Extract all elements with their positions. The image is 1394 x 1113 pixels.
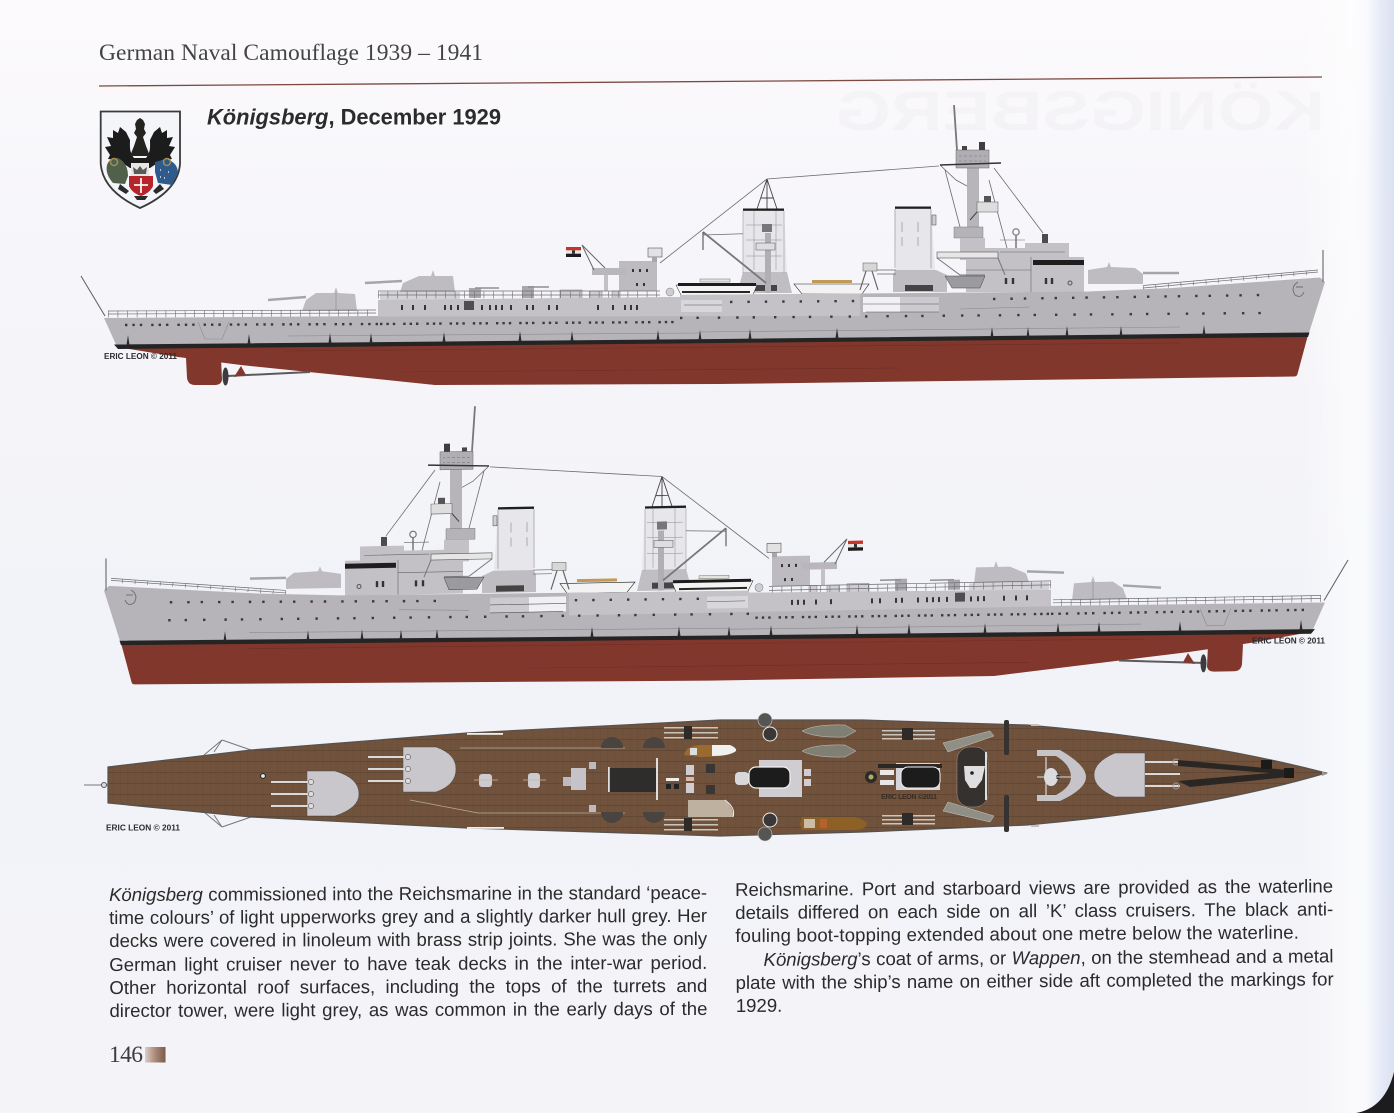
hawser bars <box>1004 720 1039 832</box>
text column right: details differed on each side on all ’K’ class cruisers. The black anti- <box>735 899 1333 923</box>
anchor chains <box>1178 760 1288 787</box>
deck outline <box>108 720 1326 836</box>
eagle head and crown <box>130 118 150 156</box>
text column right: fouling boot-topping extended about one metre below the waterline. <box>735 922 1299 946</box>
plan credit on deck: ERIC LEON ©2011 <box>881 793 937 801</box>
text column left <box>109 881 708 1020</box>
superstructure windows <box>402 305 637 310</box>
stern bollard <box>261 774 265 778</box>
after funnel plan <box>735 760 811 797</box>
text column right: Reichsmarine. Port and starboard views are provided as the waterline <box>735 875 1333 900</box>
waist squares <box>686 764 715 794</box>
aft fire control tower <box>582 245 662 291</box>
bow crest <box>1293 282 1304 296</box>
plating lines <box>198 307 1180 339</box>
bow fitting <box>1322 771 1327 776</box>
gutter shadow <box>1356 1072 1394 1113</box>
grey hull <box>104 278 1325 349</box>
red shield with cross <box>129 176 153 196</box>
fore funnel plan <box>865 763 942 790</box>
page number: 146 <box>109 1042 143 1068</box>
deck markers <box>410 733 625 829</box>
louvred hatch <box>464 301 474 310</box>
anti-aircraft mounts forward <box>882 728 935 825</box>
stern jack staff <box>81 276 105 316</box>
after turret 1 <box>268 287 357 311</box>
text column right: 1929. <box>736 995 782 1016</box>
anti-aircraft mounts aft <box>664 726 718 831</box>
aft turret A <box>271 771 359 816</box>
launch bottom <box>688 800 734 817</box>
red anti-fouling hull <box>117 335 1308 385</box>
searchlight platforms <box>758 713 777 841</box>
text column left: Other horizontal roof surfaces, including the tops of the turrets and <box>109 974 707 997</box>
supporters base <box>118 184 164 200</box>
text column right <box>735 875 1334 1016</box>
aft turret B <box>368 747 456 792</box>
after turret 2 <box>365 270 460 300</box>
launch top <box>684 745 736 757</box>
black boot-topping <box>114 332 1310 349</box>
text column left: decks were covered in linoleum with brass strip joints. She was the only <box>109 928 707 951</box>
port profile ship (mirrored view) <box>104 389 1348 694</box>
text column left: German light cruiser never to have teak decks in the inter-war period. <box>109 951 707 974</box>
crane and searchlight tower <box>703 224 775 293</box>
green quarter <box>107 158 128 184</box>
running head: German Naval Camouflage 1939 – 1941 <box>99 40 483 66</box>
darker hull seams <box>285 343 1180 372</box>
text column right: plate with the ship’s name on either side aft completed the markings for <box>736 968 1334 993</box>
horseshoe platform <box>1037 750 1086 801</box>
bridge superstructure <box>937 229 1084 292</box>
ship title: Königsberg, December 1929 <box>207 104 501 130</box>
stern paravane booms <box>84 740 251 827</box>
upper deck fittings <box>560 288 674 299</box>
credit middle: ERIC LEON © 2011 <box>1252 636 1325 646</box>
ensign flag <box>566 247 581 257</box>
main mast <box>940 105 1001 238</box>
portholes <box>125 295 1263 325</box>
rudder <box>186 358 222 385</box>
text column right: Königsberg’s coat of arms, or Wappen, on the stemhead and a metal <box>763 945 1334 969</box>
page number block <box>145 1047 166 1062</box>
credit top: ERIC LEON © 2011 <box>104 352 178 361</box>
starboard profile ship <box>81 105 1325 386</box>
central dark deckhouse <box>608 758 679 800</box>
tripod mast <box>757 179 777 212</box>
eagle wings <box>105 127 175 168</box>
text column left: time colours’ of light upperworks grey and a slightly darker hull grey. Her <box>109 905 707 928</box>
boats plan <box>800 725 867 830</box>
stern fairlead <box>102 782 106 788</box>
fore funnel <box>893 206 947 292</box>
show-through lettering: KÖNIGSBERG <box>835 79 1325 142</box>
railings <box>108 270 1318 314</box>
ship's boats <box>676 263 896 297</box>
propeller and shaft <box>222 366 310 386</box>
after funnel <box>737 208 792 293</box>
crown panel <box>131 163 149 177</box>
bow jack staff <box>1322 250 1324 282</box>
plan view of the deck <box>84 713 1327 841</box>
text column left: Königsberg commissioned into the Reichsmarine in the standard ‘peace- <box>109 881 707 904</box>
header rule <box>99 77 1322 86</box>
text column left: director tower, were light grey, as was common in the early days of the <box>109 997 707 1020</box>
credit plan: ERIC LEON © 2011 <box>106 824 181 832</box>
forward turret <box>1088 262 1179 284</box>
rigging stays <box>660 165 1043 267</box>
coat of arms shield <box>101 112 180 208</box>
semicircular shelters <box>601 737 665 823</box>
bridge plan <box>943 731 994 822</box>
forward turret plan <box>1094 753 1180 797</box>
hull spikes <box>126 325 1206 345</box>
blue quarter <box>155 159 178 185</box>
anti-aircraft guns <box>469 286 549 298</box>
